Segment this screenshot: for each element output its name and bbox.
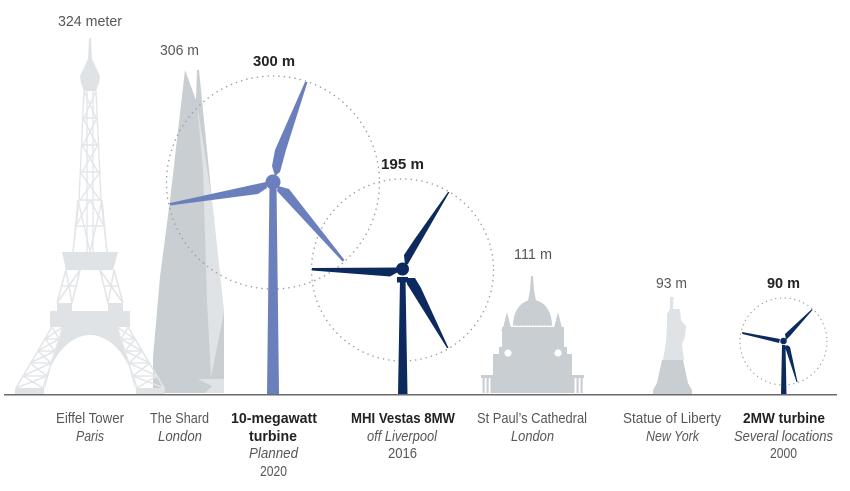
height label: 300 m: 300 m [253, 53, 295, 70]
caption: MHI Vestas 8MW: MHI Vestas 8MW [351, 410, 456, 427]
height label: 111 m: 111 m [514, 246, 552, 263]
height label: 324 meter: 324 meter [58, 13, 122, 30]
baseline [4, 394, 837, 396]
caption: St Paul's Cathedral: London [511, 428, 554, 445]
caption: 2MW turbine [734, 410, 833, 462]
caption: 2MW turbine: 2MW turbine [743, 410, 825, 427]
height label: 90 m: 90 m [767, 275, 800, 292]
turbine: 10-megawatt [170, 82, 344, 394]
caption: Statue of Liberty: New York [646, 428, 700, 445]
caption: 10-megawatt turbine: Planned [249, 445, 299, 462]
caption: Eiffel Tower: Eiffel Tower [56, 410, 124, 427]
caption: Eiffel Tower: Paris [76, 428, 104, 445]
caption: 10-megawatt turbine [231, 410, 317, 480]
icon: The Shard [153, 70, 224, 393]
caption: 10-megawatt turbine: turbine [249, 428, 297, 445]
rotor circle: 300 m [166, 76, 380, 289]
caption: Statue of Liberty: Statue of Liberty [623, 410, 721, 427]
rotor circle: 195 m [312, 179, 494, 361]
caption: 10-megawatt turbine: 2020 [260, 463, 287, 480]
turbine: 2MW [742, 309, 812, 394]
caption: Eiffel Tower [56, 410, 124, 445]
rotor circle: 90 m [740, 298, 827, 385]
caption: MHI Vestas 8MW: off Liverpool [367, 428, 438, 445]
turbine: MHI Vestas 8MW [312, 192, 450, 394]
caption: The Shard: London [158, 428, 202, 445]
caption: St Paul's Cathedral: St Paul’s Cathedral [477, 410, 587, 427]
caption: MHI Vestas 8MW [351, 410, 456, 462]
height label: 93 m: 93 m [656, 275, 687, 292]
caption: 2MW turbine: 2000 [770, 445, 797, 462]
caption: 10-megawatt turbine: 10-megawatt [231, 410, 317, 427]
caption: The Shard [150, 410, 209, 445]
caption: 2MW turbine: Several locations [734, 428, 833, 445]
caption: Statue of Liberty [623, 410, 721, 445]
caption: The Shard: The Shard [150, 410, 209, 427]
height label: 306 m: 306 m [160, 42, 199, 59]
caption: St Paul's Cathedral [477, 410, 587, 445]
icon: St Paul's Cathedral [481, 276, 584, 393]
icon: Statue of Liberty [653, 297, 692, 394]
height label: 195 m: 195 m [381, 156, 424, 173]
caption: MHI Vestas 8MW: 2016 [388, 445, 417, 462]
icon: Eiffel Tower [15, 38, 165, 394]
